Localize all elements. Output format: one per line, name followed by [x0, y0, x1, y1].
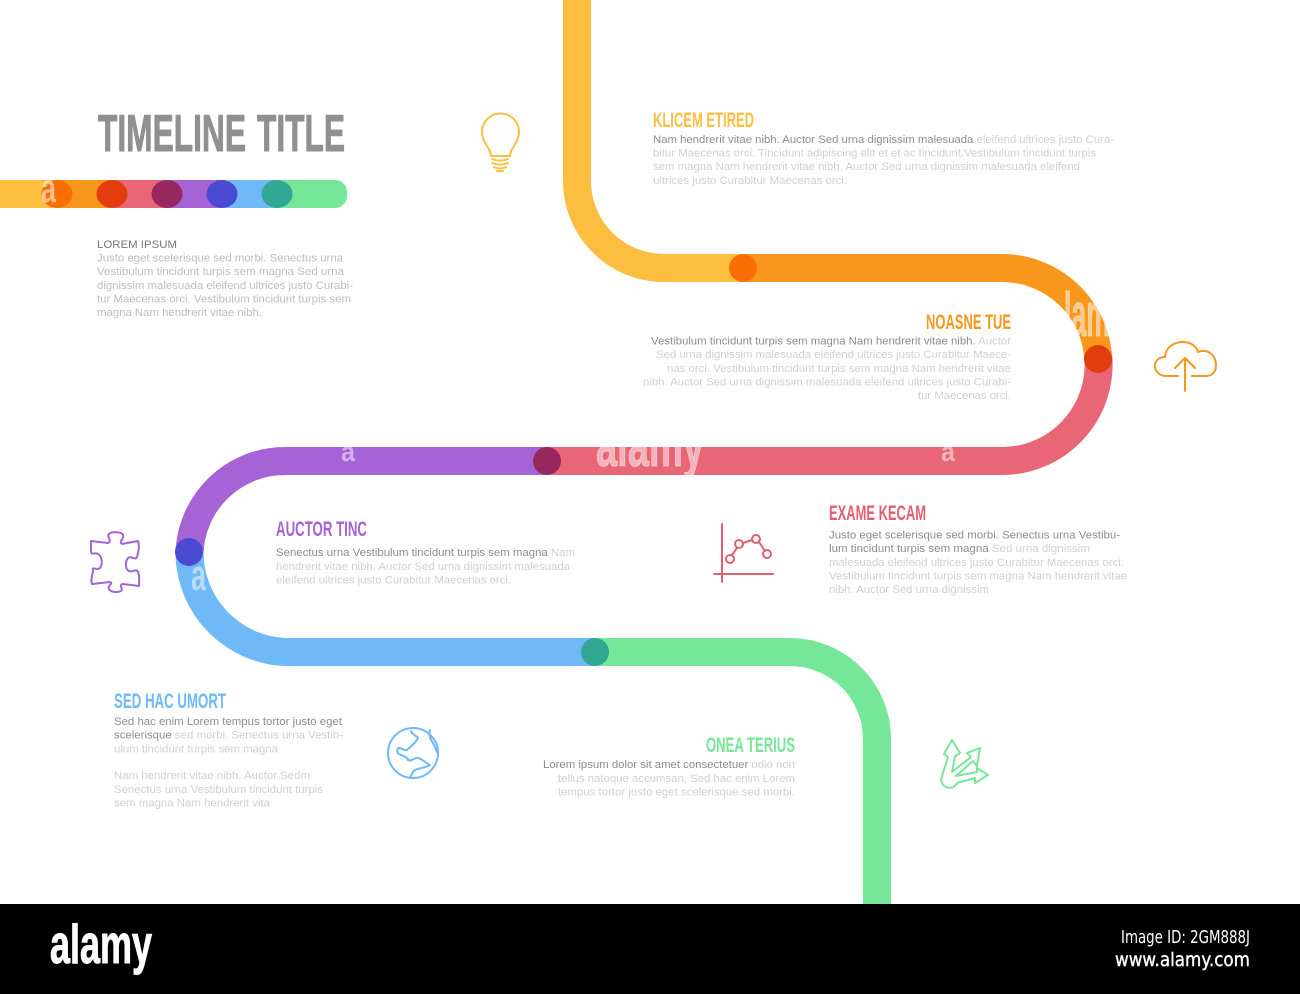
watermark: center: alamy — [596, 412, 704, 479]
step 3 body: malesuada eleifend ultrices justo Curabitur Maecenas orci. — [829, 557, 1124, 569]
step 5 body: Senectus urna Vestibulum tincidunt turpis — [114, 784, 324, 796]
icon: branching arrows — [941, 740, 988, 788]
winding timeline road — [189, 0, 1099, 904]
step 2 body: Sed urna dignissim malesuada eleifend ultrices justo Curabitur Maece- — [656, 349, 1011, 361]
dot: teal — [581, 638, 609, 666]
step 4 body: eleifend ultrices justo Curabitur Maecenas orci. — [276, 574, 511, 586]
intro body: Justo eget scelerisque sed morbi. Senectus urna — [97, 252, 344, 264]
bar segments — [0, 180, 347, 208]
step 6 body: tempus tortor justo eget scelerisque sed morbi. — [558, 786, 795, 798]
step 1 body — [653, 134, 1114, 187]
footer background — [0, 904, 1300, 994]
step 1 heading: KLICEM ETIRED — [653, 109, 754, 132]
road segment: green — [595, 652, 877, 904]
step 5 body: Sed hac enim Lorem tempus tortor justo eget — [114, 716, 342, 728]
icon: cloud upload — [1155, 342, 1216, 391]
watermark fragments on road — [191, 281, 1110, 600]
step 3 body — [829, 530, 1127, 596]
road segment: yellow — [577, 0, 743, 268]
footer band — [0, 904, 1300, 994]
road segment: red — [547, 358, 1099, 461]
icon: puzzle piece — [91, 532, 139, 592]
step 3 body: lum tincidunt turpis sem magna Sed urna dignissim — [829, 543, 1090, 555]
step 4 body: hendrerit vitae nibh. Auctor Sed urna dignissim malesuada — [276, 561, 571, 573]
intro body: dignissim malesuada eleifend ultrices justo Curabi- — [97, 280, 353, 292]
bar watermark: a — [41, 167, 57, 211]
step 2 body — [643, 336, 1011, 402]
step 6 body: Lorem ipsum dolor sit amet consectetuer odio non — [543, 759, 795, 771]
step 4 body: Senectus urna Vestibulum tincidunt turpis sem magna Nam — [276, 547, 575, 559]
road segment: orange — [743, 268, 1098, 360]
dot: red-orange — [1084, 345, 1112, 373]
step 6 body — [543, 759, 795, 798]
icon: line chart — [714, 524, 773, 582]
step 2 body: tur Maecenas orci. — [918, 390, 1011, 402]
image id: Image ID: 2GM888J — [1121, 927, 1250, 948]
intro heading: LOREM IPSUM — [97, 239, 177, 251]
watermark: red a: a — [941, 436, 955, 467]
step 1 body: ultrices justo Curabitur Maecenas orci. — [653, 175, 847, 187]
step 1: Klicem Etired — [653, 109, 1114, 187]
title color bar — [0, 180, 347, 208]
step 3: Exame Kecam — [829, 502, 1127, 596]
step 1 body: Nam hendrerit vitae nibh. Auctor Sed urna dignissim malesuada eleifend ultrices justo Cura- — [653, 134, 1114, 146]
step 6 heading: ONEA TERIUS — [706, 734, 795, 757]
step 3 heading: EXAME KECAM — [829, 502, 926, 525]
intro body: Vestibulum tincidunt turpis sem magna Sed urna — [97, 266, 345, 278]
step 2 body: nas orci. Vestibulum tincidunt turpis sem magna Nam hendrerit vitae — [667, 363, 1011, 375]
dot: maroon — [533, 447, 561, 475]
road segment: blue — [189, 551, 595, 652]
step 2 heading: NOASNE TUE — [926, 311, 1011, 334]
step 5 body — [114, 716, 343, 810]
step 5 body: ulum tincidunt turpis sem magna — [114, 744, 279, 756]
intro body: tur Maecenas orci. Vestibulum tincidunt turpis sem — [97, 294, 351, 306]
step 5 body: scelerisque sed morbi. Senectus urna Vestib- — [114, 730, 343, 742]
step 6: Onea Terius — [543, 734, 795, 798]
title: TIMELINE — [98, 105, 246, 163]
step 2 body: nibh. Auctor Sed urna dignissim malesuada eleifend ultrices justo Curabi- — [643, 376, 1011, 388]
step 1 body: sem magna Nam hendrerit vitae nibh. Auctor Sed urna dignissim malesuada eleifend — [653, 161, 1080, 173]
intro body — [97, 252, 353, 319]
icon: light bulb — [482, 114, 519, 171]
step 3 body: nibh. Auctor Sed urna dignissim — [829, 584, 989, 596]
watermark: purple a: a — [341, 436, 355, 467]
step 4 body — [276, 547, 575, 586]
dot: indigo — [175, 538, 203, 566]
step 2: Noasne Tue — [643, 311, 1011, 402]
road milestone dots — [175, 254, 1112, 666]
step 4 heading: AUCTOR TINC — [276, 518, 367, 541]
step 5 body: Nam hendrerit vitae nibh. Auctor Sedm — [114, 770, 310, 782]
step 6 body: tellus natoque accumsan. Sed hac enim Lorem — [558, 773, 795, 785]
step 4: Auctor Tinc — [276, 518, 575, 586]
bar dots — [42, 180, 292, 208]
intro text block — [97, 239, 353, 319]
step 2 body: Vestibulum tincidunt turpis sem magna Nam hendrerit vitae nibh. Auctor — [651, 336, 1011, 348]
step 1 body: bitur Maecenas orci. Tincidunt adipiscing elit et et ac tincidunt.Vestibulum tincidunt turpis — [653, 148, 1097, 160]
alamy logo: alamy — [50, 913, 152, 975]
step 5 body: sem magna Nam hendrerit vita — [114, 798, 271, 810]
website: www.alamy.com — [1115, 949, 1250, 971]
text: lam — [1064, 281, 1110, 350]
intro body: magna Nam hendrerit vitae nibh. — [97, 307, 262, 319]
step 5 heading: SED HAC UMORT — [114, 690, 226, 713]
watermark: blue a: a — [191, 551, 206, 600]
dot: orange — [729, 254, 757, 282]
step 3 body: Justo eget scelerisque sed morbi. Senectus urna Vestibu- — [829, 530, 1120, 542]
road segment: purple — [190, 461, 547, 553]
step 5: Sed Hac Umort — [114, 690, 343, 810]
step 3 body: Vestibulum tincidunt turpis sem magna Nam hendrerit vitae — [829, 570, 1127, 582]
title: TITLE — [257, 105, 345, 163]
icon: globe — [388, 728, 438, 778]
